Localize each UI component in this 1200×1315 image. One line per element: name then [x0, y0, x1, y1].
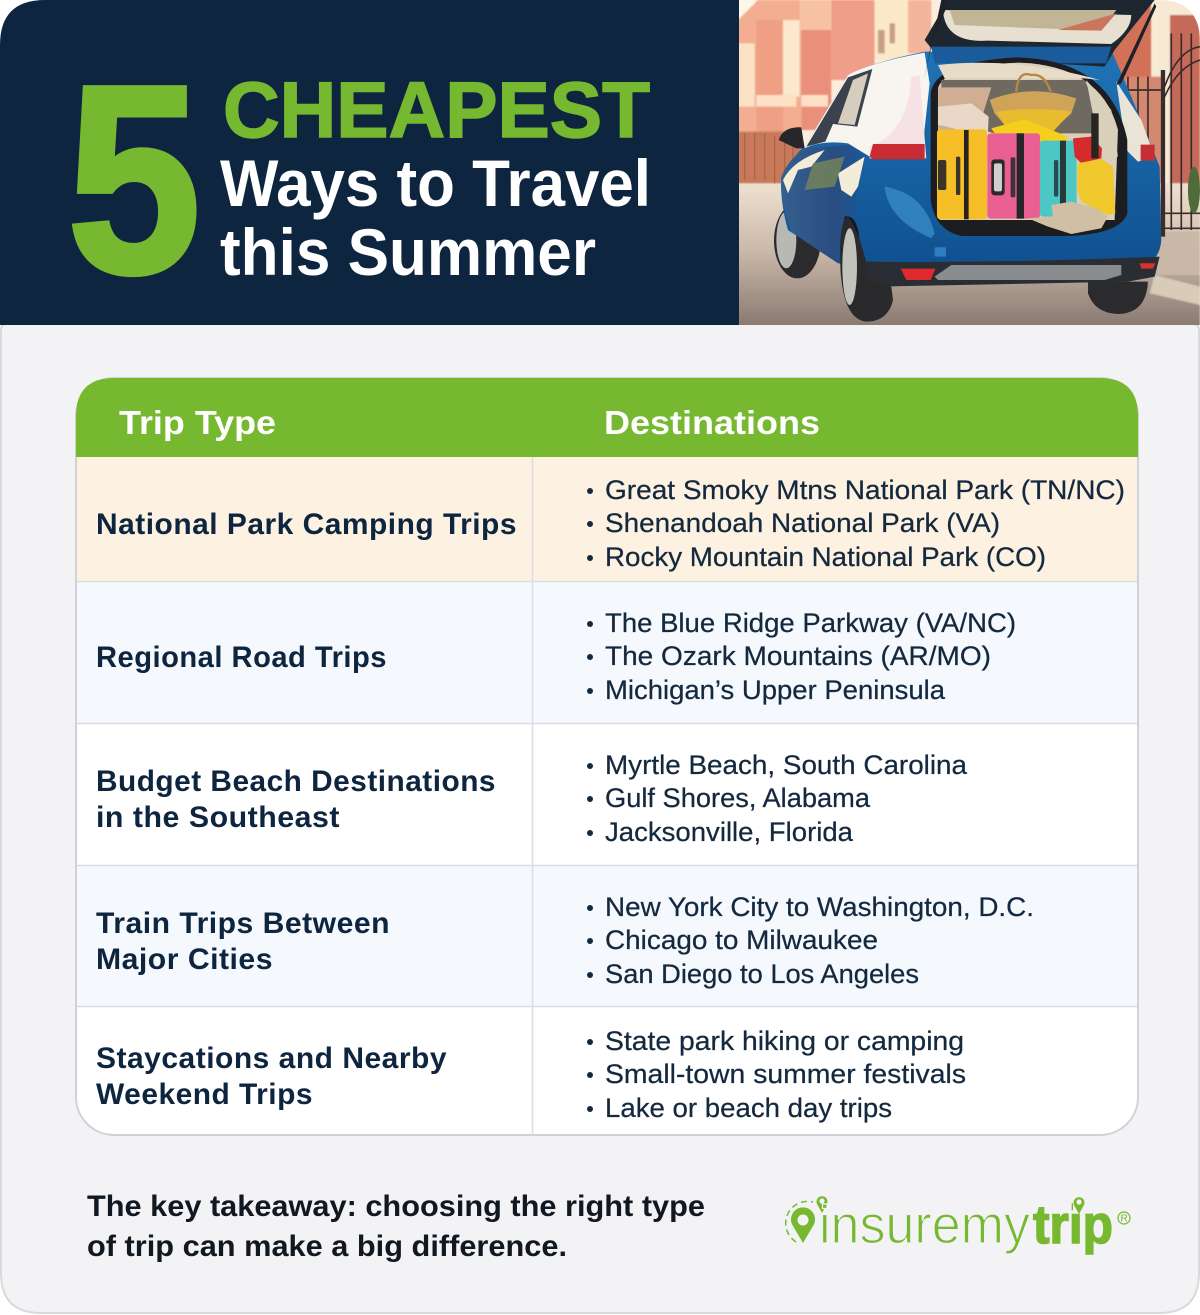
logo: insuremytrip: insuremy: [819, 1195, 1030, 1255]
open tailgate: [925, 0, 1155, 67]
title: [220, 65, 651, 289]
row: national park camping: [96, 475, 1125, 572]
table header: [76, 378, 1138, 457]
iron fence and gate: [1128, 33, 1200, 237]
near wheel: [840, 217, 893, 322]
row: train trips: [96, 892, 1034, 989]
row: staycations: Staycations and Nearby: [96, 1042, 447, 1075]
logo: insuremytrip: R: [1120, 1214, 1128, 1224]
title: Ways to Travel: [220, 146, 651, 220]
row: train trips: San Diego to Los Angeles: [605, 959, 919, 989]
icon: map pin with dashed route: [786, 1196, 828, 1243]
content panel: [1, 324, 1199, 1313]
row: staycations: Lake or beach day trips: [605, 1093, 892, 1123]
side panel with reflections: [781, 143, 870, 263]
key takeaway: The key takeaway: choosing the right type: [87, 1190, 705, 1223]
row: budget beach destinations: Gulf Shores, Alabama: [605, 783, 871, 813]
row: regional road trips: The Blue Ridge Parkway (VA/NC): [605, 608, 1016, 638]
row: regional road trips: The Ozark Mountains (AR/MO): [605, 641, 991, 671]
table header: Trip Type: [119, 404, 276, 441]
row: staycations: Weekend Trips: [96, 1078, 313, 1111]
row: budget beach destinations: in the Southeast: [96, 801, 340, 834]
white upper quarter: [805, 53, 930, 157]
rear bumper: [861, 257, 1160, 287]
far wheels: [774, 210, 820, 278]
key takeaway: of trip can make a big difference.: [87, 1230, 567, 1263]
row: budget beach destinations: [96, 750, 968, 847]
row: regional road trips: Michigan’s Upper Peninsula: [605, 675, 946, 705]
row: budget beach destinations: Myrtle Beach, South Carolina: [605, 750, 968, 780]
header banner: [0, 0, 740, 329]
row: staycations: State park hiking or camping: [605, 1026, 964, 1056]
row: staycations: [96, 1026, 966, 1123]
street background: [738, 0, 1200, 330]
row: train trips: Train Trips Between: [96, 907, 390, 940]
row: train trips: New York City to Washington, D.C.: [605, 892, 1034, 922]
key takeaway: [87, 1190, 705, 1263]
row: national park camping: Rocky Mountain National Park (CO): [605, 542, 1046, 572]
car body: [781, 50, 1161, 277]
row: budget beach destinations: Jacksonville, Florida: [605, 817, 854, 847]
photo: packed car with luggage: [738, 0, 1200, 330]
row: national park camping: National Park Camping Trips: [96, 508, 517, 541]
table header: Destinations: [604, 404, 820, 441]
row: train trips: Major Cities: [96, 943, 273, 976]
title: this Summer: [220, 215, 596, 289]
table body background: [76, 378, 1138, 1135]
table: [76, 378, 1138, 1135]
numeral 5: 5: [67, 29, 201, 329]
row: regional road trips: Regional Road Trips: [96, 641, 387, 674]
row backgrounds: [77, 457, 1137, 1135]
title: CHEAPEST: [223, 65, 650, 154]
logo: insuremytrip: trip: [1033, 1195, 1113, 1255]
luggage: [937, 74, 1115, 234]
row: staycations: Small-town summer festivals: [605, 1059, 966, 1089]
row: budget beach destinations: Budget Beach Destinations: [96, 765, 496, 798]
row: national park camping: Great Smoky Mtns National Park (TN/NC): [605, 475, 1125, 505]
row: national park camping: Shenandoah National Park (VA): [605, 508, 1000, 538]
row: regional road trips: [96, 608, 1016, 705]
cargo opening: [931, 57, 1127, 236]
logo: insuremytrip: [786, 1195, 1130, 1255]
row: train trips: Chicago to Milwaukee: [605, 925, 878, 955]
